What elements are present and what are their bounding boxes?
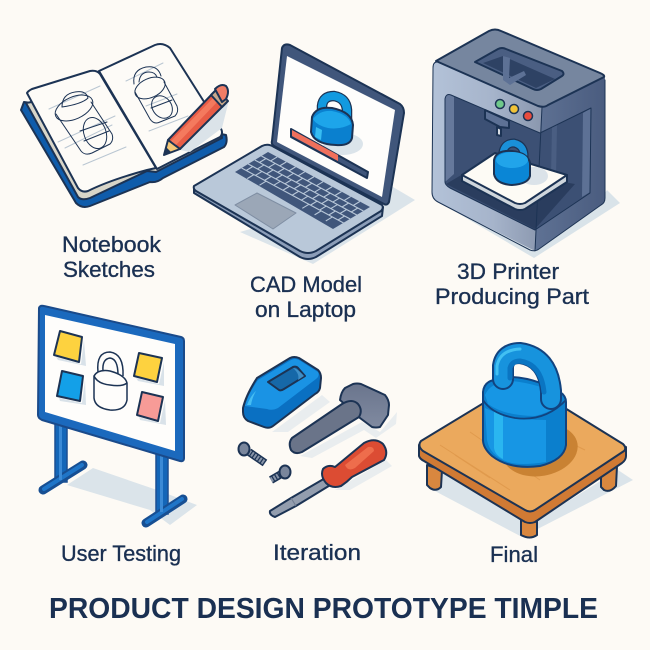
icon: printer interior [445, 94, 591, 230]
panel: CAD model on laptop: on Laptop [255, 297, 356, 322]
label: 3D printer producing part: 3D Printer [457, 259, 559, 284]
panel: final [419, 349, 633, 567]
icon: screw short [271, 466, 290, 480]
icon: table legs [427, 465, 617, 538]
icon: whiteboard [38, 306, 184, 461]
panel: user testing [38, 306, 197, 566]
shadow: tools [272, 395, 397, 490]
icon: CAD padlock [311, 96, 353, 145]
icon: touchpad [235, 193, 296, 229]
icon: printed padlock [494, 143, 530, 185]
label: notebook sketches: Notebook [62, 232, 162, 257]
panel: iteration [238, 357, 397, 565]
icon: left page [27, 71, 156, 192]
icon: final padlock [483, 349, 566, 467]
sticky: pink [137, 392, 163, 421]
icon: laptop screen [272, 44, 404, 205]
icon: printer front-left face [432, 62, 542, 251]
icon: printer top face [436, 30, 604, 107]
icon: print bed [462, 153, 567, 210]
icon: screw long [238, 442, 265, 463]
panel: 3D printer [432, 30, 620, 309]
shadow: board stand [67, 468, 197, 525]
shadow: table [433, 470, 633, 537]
icon: pencil [164, 85, 229, 155]
outline: printer frame [432, 62, 605, 251]
shadow: printer [432, 190, 620, 258]
icon: laptop base [194, 188, 383, 259]
icon: status lights [496, 100, 532, 120]
icon: printer right face [535, 73, 605, 250]
icon: notebook page edges [26, 90, 222, 199]
shadow: screen lock [323, 133, 363, 155]
icon: screwdriver [270, 440, 386, 517]
icon: blue prototype block [243, 357, 321, 428]
icon: right page [99, 44, 222, 169]
title: PRODUCT DESIGN PROTOTYPE TIMPLE [49, 593, 598, 625]
sticky: yellow top left [54, 331, 82, 362]
sketch: right lock [126, 63, 188, 131]
label: CAD model on laptop: CAD Model [250, 272, 362, 297]
shadow: laptop [240, 187, 415, 264]
sticky: yellow right [134, 353, 162, 382]
shadow: lock on table [498, 418, 582, 482]
sticky: blue [57, 371, 83, 401]
panel: CAD model on laptop [194, 44, 415, 322]
panel: notebook sketches [21, 44, 229, 282]
icon: notebook cover [21, 102, 227, 207]
label: iteration: Iteration [273, 540, 361, 565]
icon: hammer [290, 384, 389, 453]
sketch: left lock [49, 86, 126, 165]
icon: left leg [43, 422, 83, 490]
label: user testing: User Testing [61, 541, 181, 566]
icon: progress bar [291, 129, 368, 178]
label: final: Final [490, 542, 538, 567]
icon: table top [419, 383, 626, 523]
icon: right leg [146, 454, 183, 523]
panel: 3D printer: Producing Part [435, 284, 589, 309]
icon: print head [485, 110, 509, 136]
icon: shackle [497, 349, 551, 399]
icon: keyboard [235, 152, 370, 229]
icon: printer top slot [475, 48, 564, 90]
panel: notebook sketches: Sketches [63, 257, 155, 282]
icon: padlock outline [94, 352, 127, 410]
sticky: shadows [56, 340, 166, 425]
